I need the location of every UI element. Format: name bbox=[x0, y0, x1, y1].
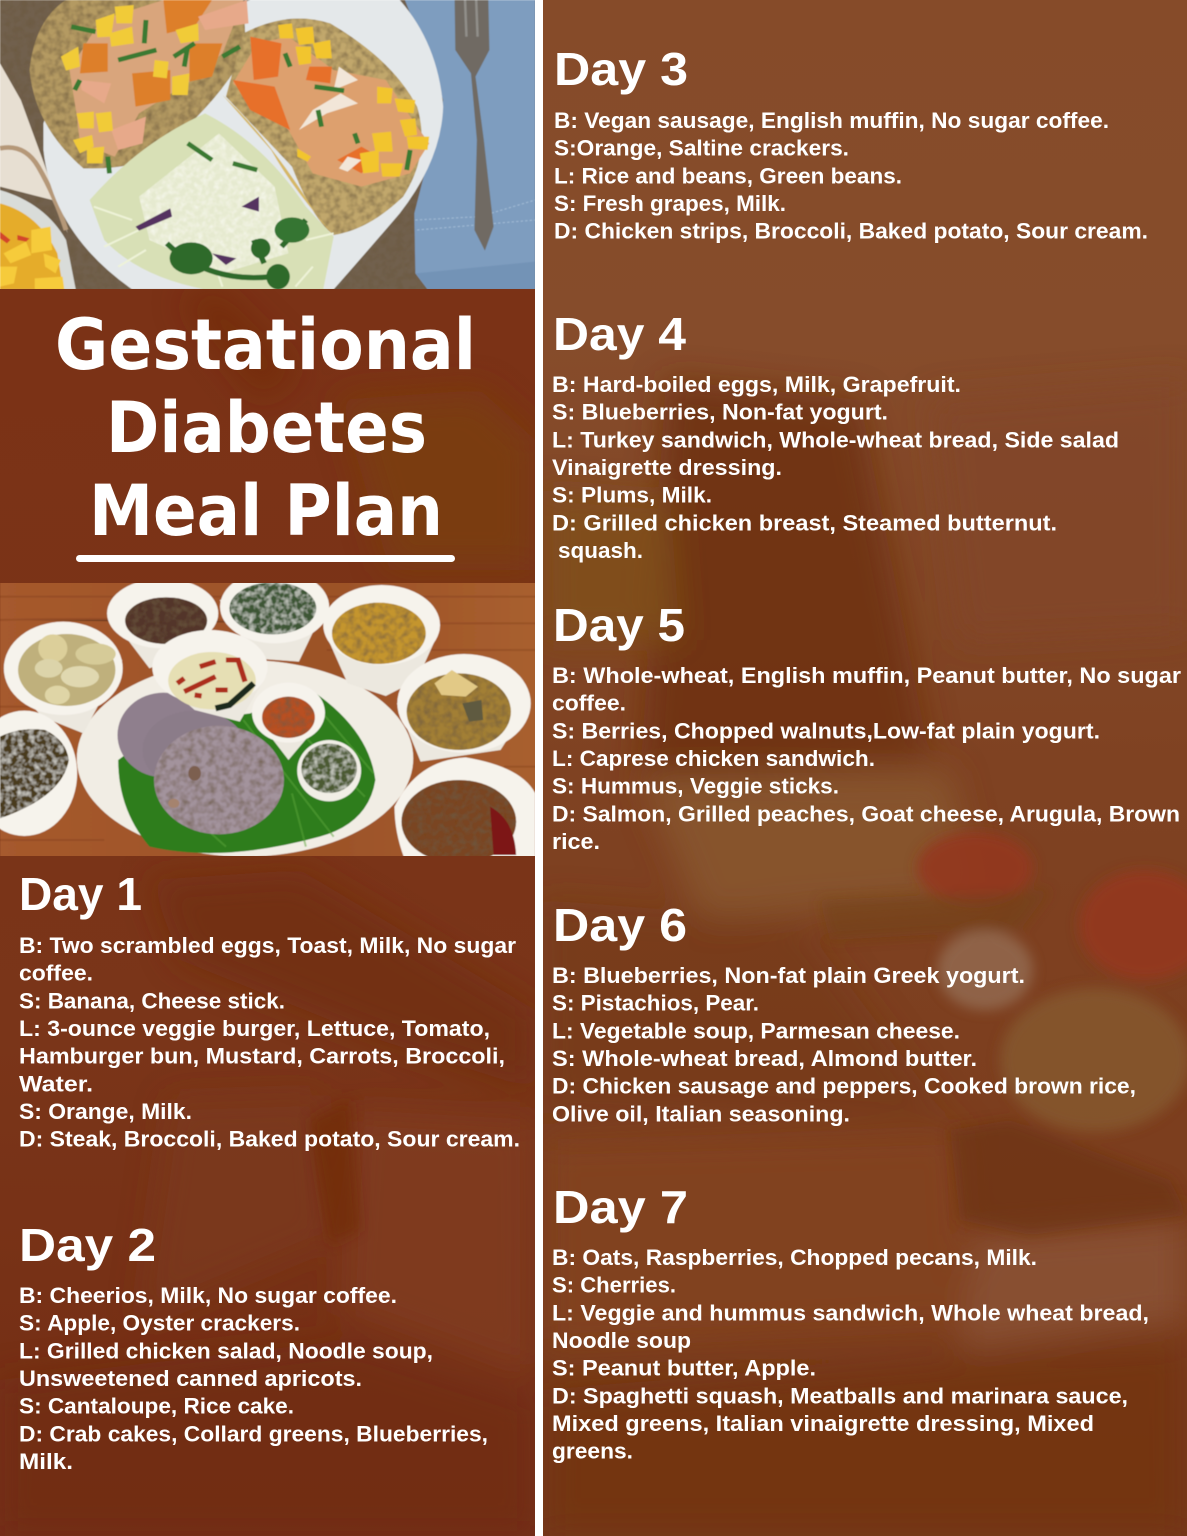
section: Day 6: B: Blueberries, Non-fat plain Greek yogurt. bbox=[552, 963, 1025, 988]
section: Day 2: S: Apple, Oyster crackers. bbox=[19, 1311, 300, 1336]
section: Day 6: S: Whole-wheat bread, Almond butter. bbox=[552, 1046, 977, 1071]
section: Day 4: Vinaigrette dressing. bbox=[552, 455, 782, 480]
bowl: meat curry bbox=[394, 757, 535, 860]
section: Day 7: greens. bbox=[552, 1439, 633, 1464]
section: Day 7: Day 7 bbox=[553, 1181, 688, 1233]
section: Day 1: S: Banana, Cheese stick. bbox=[19, 988, 285, 1013]
panel: left column background bbox=[0, 289, 535, 1536]
title: Gestational Diabetes Meal Plan: Gestational bbox=[55, 304, 476, 386]
section: Day 1: B: Two scrambled eggs, Toast, Milk, No sugar bbox=[19, 933, 516, 958]
section: Day 1: Water. bbox=[19, 1071, 93, 1096]
section: Day 1: Day 1 bbox=[19, 868, 142, 920]
section: Day 5: S: Hummus, Veggie sticks. bbox=[552, 774, 839, 799]
section: Day 7: B: Oats, Raspberries, Chopped pecans, Milk. bbox=[552, 1245, 1037, 1270]
section: Day 6: Day 6 bbox=[553, 899, 687, 951]
photo: fish tacos with slaw on a white plate bbox=[0, 0, 545, 295]
section: Day 7 bbox=[552, 1181, 1149, 1464]
bowl of mango salsa bbox=[0, 190, 76, 289]
bowl: yogurt with chilli oil bbox=[189, 705, 245, 722]
section: Day 2: S: Cantaloupe, Rice cake. bbox=[19, 1394, 294, 1419]
section: Day 5: D: Salmon, Grilled peaches, Goat cheese, Arugula, Brown bbox=[552, 801, 1180, 826]
section: Day 7: S: Cherries. bbox=[552, 1273, 676, 1298]
section: Day 1: L: 3-ounce veggie burger, Lettuce, Tomato, bbox=[19, 1016, 490, 1041]
section: Day 3: L: Rice and beans, Green beans. bbox=[554, 163, 902, 188]
bowl: yellow curry bbox=[396, 703, 506, 762]
title: Gestational Diabetes Meal Plan: Diabetes bbox=[106, 387, 427, 469]
section: Day 4 bbox=[552, 308, 1119, 563]
title underline bbox=[76, 555, 455, 562]
section: Day 6: Olive oil, Italian seasoning. bbox=[552, 1101, 850, 1126]
section: Day 3: B: Vegan sausage, English muffin, No sugar coffee. bbox=[554, 108, 1109, 133]
section: Day 4: B: Hard-boiled eggs, Milk, Grapefruit. bbox=[552, 372, 961, 397]
small bowl: chutney bbox=[272, 738, 307, 761]
section: Day 2: Milk. bbox=[19, 1449, 73, 1474]
section: Day 6 bbox=[552, 899, 1136, 1126]
section: Day 2: D: Crab cakes, Collard greens, Blueberries, bbox=[19, 1421, 488, 1446]
title: Gestational Diabetes Meal Plan bbox=[55, 304, 476, 562]
section: Day 5: S: Berries, Chopped walnuts,Low-fat plain yogurt. bbox=[552, 718, 1100, 743]
section: Day 3: S:Orange, Saltine crackers. bbox=[554, 136, 849, 161]
section: Day 3 bbox=[554, 43, 1148, 244]
section: Day 1: S: Orange, Milk. bbox=[19, 1099, 192, 1124]
bowl: white curry bbox=[36, 660, 123, 734]
panel: right column background bbox=[543, 0, 1187, 1536]
title: Gestational Diabetes Meal Plan: Meal Plan bbox=[89, 470, 443, 552]
fork bbox=[455, 0, 494, 251]
section: Day 2: L: Grilled chicken salad, Noodle soup, bbox=[19, 1338, 433, 1363]
section: Day 4: S: Blueberries, Non-fat yogurt. bbox=[552, 400, 888, 425]
section: Day 3: Day 3 bbox=[554, 43, 688, 95]
section: Day 4: L: Turkey sandwich, Whole-wheat bread, Side salad bbox=[552, 427, 1119, 452]
section: Day 1: coffee. bbox=[19, 961, 93, 986]
section: Day 2: B: Cheerios, Milk, No sugar coffee. bbox=[19, 1283, 397, 1308]
section: Day 4: Day 4 bbox=[553, 308, 686, 360]
section: Day 6: L: Vegetable soup, Parmesan cheese. bbox=[552, 1018, 960, 1043]
bowl: dal bbox=[324, 630, 440, 696]
section: Day 3: S: Fresh grapes, Milk. bbox=[554, 191, 786, 216]
section: Day 4: squash. bbox=[558, 538, 643, 563]
bowl: meat bbox=[128, 640, 161, 669]
section: Day 5 bbox=[552, 599, 1181, 854]
section: Day 5: Day 5 bbox=[553, 599, 685, 651]
section: Day 7: D: Spaghetti squash, Meatballs and marinara sauce, bbox=[552, 1383, 1128, 1408]
section: Day 6: S: Pistachios, Pear. bbox=[552, 991, 759, 1016]
section: Day 5: rice. bbox=[552, 829, 600, 854]
section: Day 5: B: Whole-wheat, English muffin, Peanut butter, No sugar bbox=[552, 663, 1181, 688]
photo: thali with bowls and rotis on banana leaf bbox=[0, 570, 545, 863]
small bowl: herb chutney bbox=[297, 740, 361, 801]
section: Day 2: Day 2 bbox=[19, 1219, 156, 1271]
section: Day 2 bbox=[19, 1219, 488, 1474]
section: Day 7: Noodle soup bbox=[552, 1328, 691, 1353]
section: Day 6: D: Chicken sausage and peppers, Cooked brown rice, bbox=[552, 1074, 1136, 1099]
section: Day 1: D: Steak, Broccoli, Baked potato, Sour cream. bbox=[19, 1126, 520, 1152]
section: Day 4: D: Grilled chicken breast, Steamed butternut. bbox=[552, 510, 1057, 535]
section: Day 7: L: Veggie and hummus sandwich, Whole wheat bread, bbox=[552, 1300, 1149, 1325]
section: Day 1: Hamburger bun, Mustard, Carrots, Broccoli, bbox=[19, 1044, 505, 1069]
section: Day 4: S: Plums, Milk. bbox=[552, 483, 712, 508]
left taco filling bbox=[70, 0, 243, 157]
section: Day 1 bbox=[19, 868, 520, 1152]
section: Day 7: Mixed greens, Italian vinaigrette dressing, Mixed bbox=[552, 1411, 1094, 1436]
bowl: greens bbox=[220, 600, 328, 662]
section: Day 3: D: Chicken strips, Broccoli, Baked potato, Sour cream. bbox=[554, 219, 1148, 244]
section: Day 7: S: Peanut butter, Apple. bbox=[552, 1356, 816, 1381]
section: Day 5: L: Caprese chicken sandwich. bbox=[552, 746, 875, 771]
right taco filling bbox=[233, 37, 429, 187]
section: Day 5: coffee. bbox=[552, 691, 626, 716]
section: Day 2: Unsweetened canned apricots. bbox=[19, 1366, 362, 1391]
bowl: stir-fried beans bbox=[0, 711, 77, 836]
